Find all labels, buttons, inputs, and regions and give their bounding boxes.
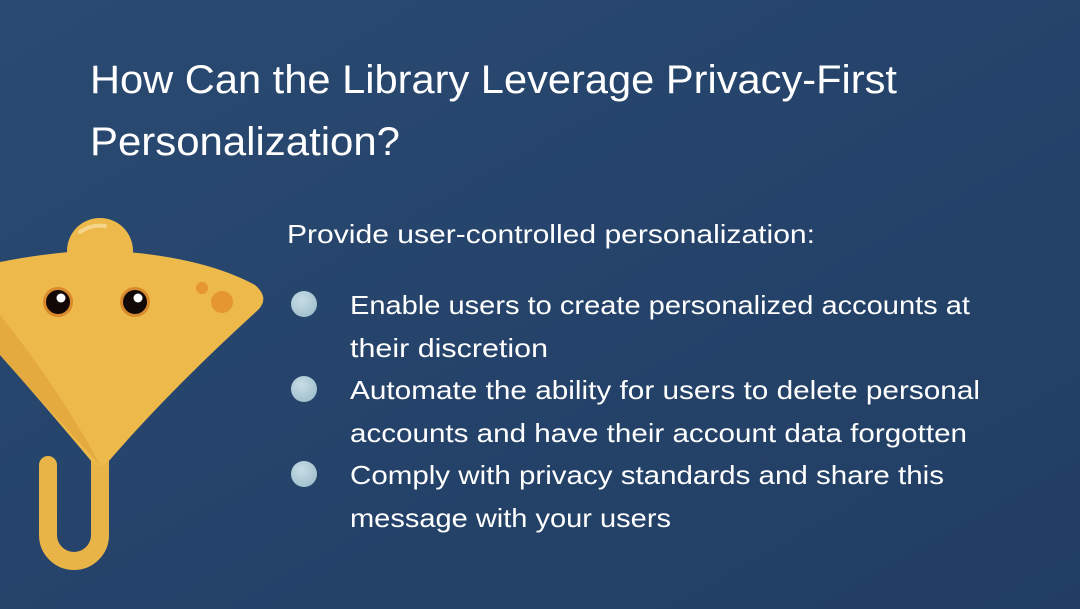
bullet 1 <box>291 290 971 363</box>
bullet 3 <box>291 460 944 533</box>
bullet 3: message with your users <box>350 503 671 533</box>
subheading: Provide user-controlled personalization: <box>287 219 815 249</box>
title: Personalization? <box>90 120 400 164</box>
bullet 2 <box>291 375 980 448</box>
icon: stingray mascot <box>0 218 263 561</box>
bullet list <box>291 290 980 533</box>
bullet 3: Comply with privacy standards and share this <box>350 460 944 490</box>
title: How Can the Library Leverage Privacy-First <box>90 58 897 102</box>
title <box>90 58 897 164</box>
bullet 1: Enable users to create personalized accounts at <box>350 290 971 320</box>
bullet 2: Automate the ability for users to delete personal <box>350 375 980 405</box>
bullet 1: their discretion <box>350 333 548 363</box>
bullet 2: accounts and have their account data forgotten <box>350 418 967 448</box>
